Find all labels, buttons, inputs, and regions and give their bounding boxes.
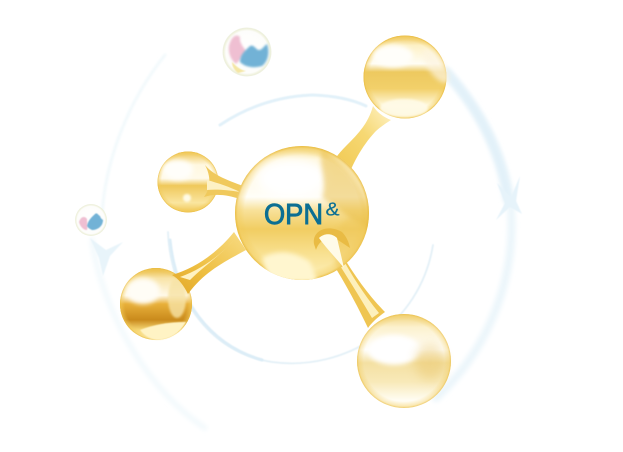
sparkle: right <box>496 176 522 220</box>
ring: inner bottom arc <box>168 232 433 363</box>
connector stems <box>172 106 391 328</box>
OPN: OPN <box>264 199 323 231</box>
highlight <box>126 278 160 304</box>
bubble: large top <box>222 28 272 76</box>
iridescent pink <box>79 217 87 230</box>
ring: outer left arc <box>102 55 165 215</box>
logo text <box>264 198 340 231</box>
iridescent pink <box>229 35 247 64</box>
orbit rings <box>90 55 522 428</box>
stem base <box>314 228 350 250</box>
stem: to top right sphere <box>329 106 391 181</box>
iridescent yellow <box>232 62 246 73</box>
sphere: top right <box>364 36 454 118</box>
ring: inner top arc <box>220 95 366 125</box>
stem: to bottom left sphere <box>172 232 246 294</box>
center right lower tint <box>333 219 366 268</box>
sphere: center <box>235 146 370 282</box>
center lower glow <box>262 252 318 282</box>
center highlight <box>256 158 328 198</box>
center shaded right <box>321 150 370 230</box>
iridescent blue <box>240 44 268 67</box>
sphere: small left <box>158 152 218 212</box>
ampersand: & <box>326 198 340 220</box>
bubble: small left <box>75 204 107 236</box>
sparkle: left <box>90 238 123 276</box>
orbit overlap glow <box>418 45 454 87</box>
stem: to small left sphere <box>204 165 243 199</box>
stem: to bottom right sphere <box>318 232 385 328</box>
molecule infographic <box>75 28 522 428</box>
sphere: bottom left <box>120 268 192 340</box>
iridescent blue <box>87 213 103 230</box>
sphere: bottom right <box>357 314 451 408</box>
ring: outer right arc <box>436 72 512 398</box>
